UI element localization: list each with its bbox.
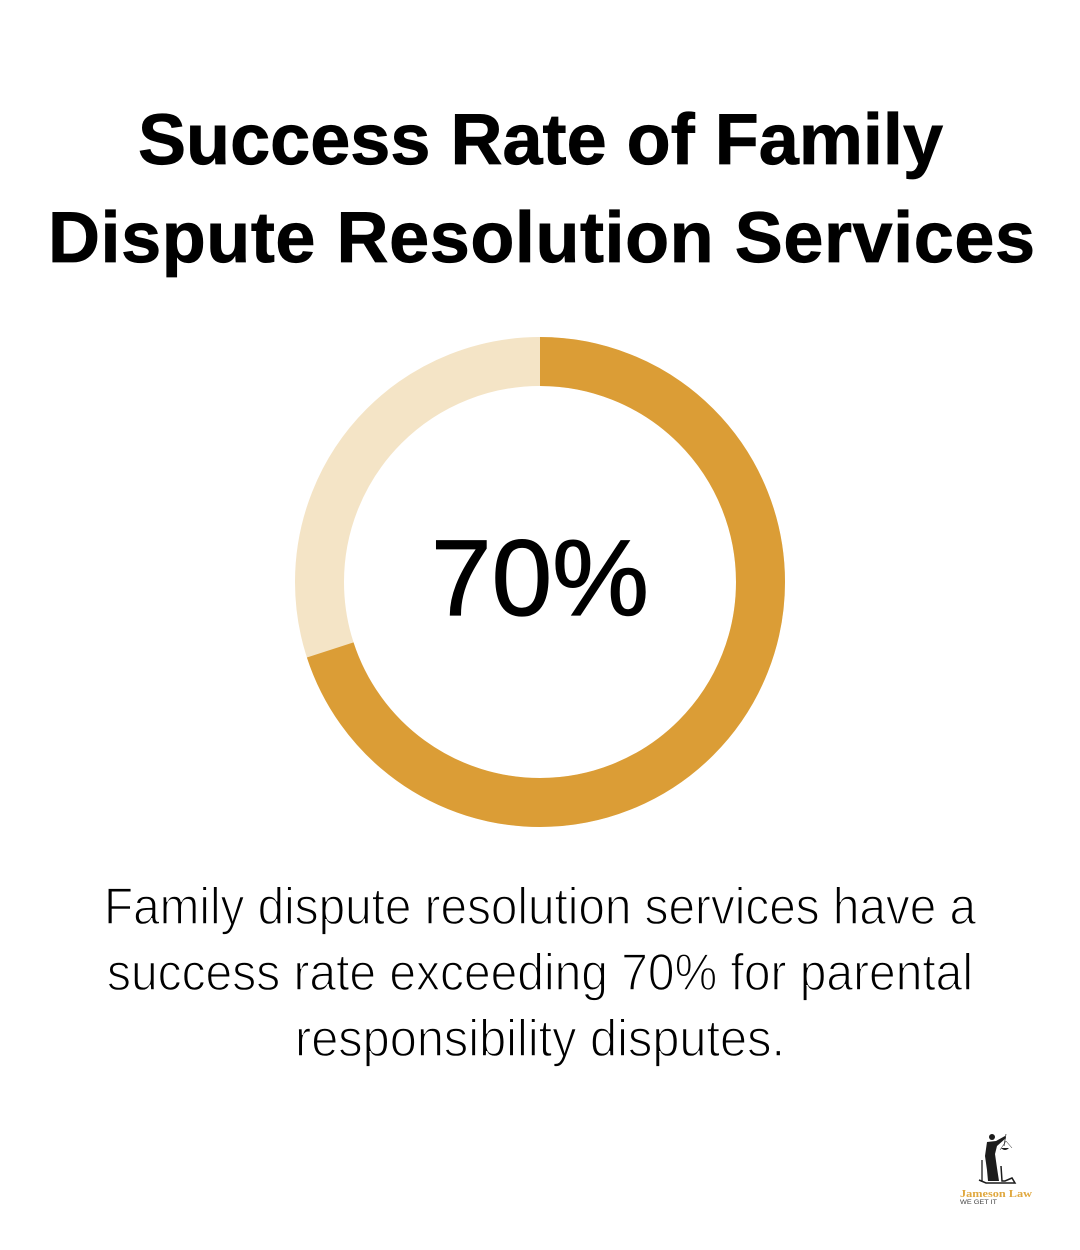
logo tagline: WE GET IT [960,1199,997,1206]
logo name: Jameson Law [960,1189,1032,1200]
donut chart: 70% [320,362,760,802]
title [48,100,1035,278]
description text: responsibility disputes. [295,1010,785,1068]
icon: lady justice [979,1134,1015,1183]
logo: Jameson Law [960,1134,1032,1206]
title: Dispute Resolution Services [48,198,1035,278]
description text [104,878,976,1068]
donut value: 70% [431,517,649,638]
description text: Family dispute resolution services have a [104,878,976,936]
description text: success rate exceeding 70% for parental [107,944,973,1002]
title: Success Rate of Family [138,100,943,180]
